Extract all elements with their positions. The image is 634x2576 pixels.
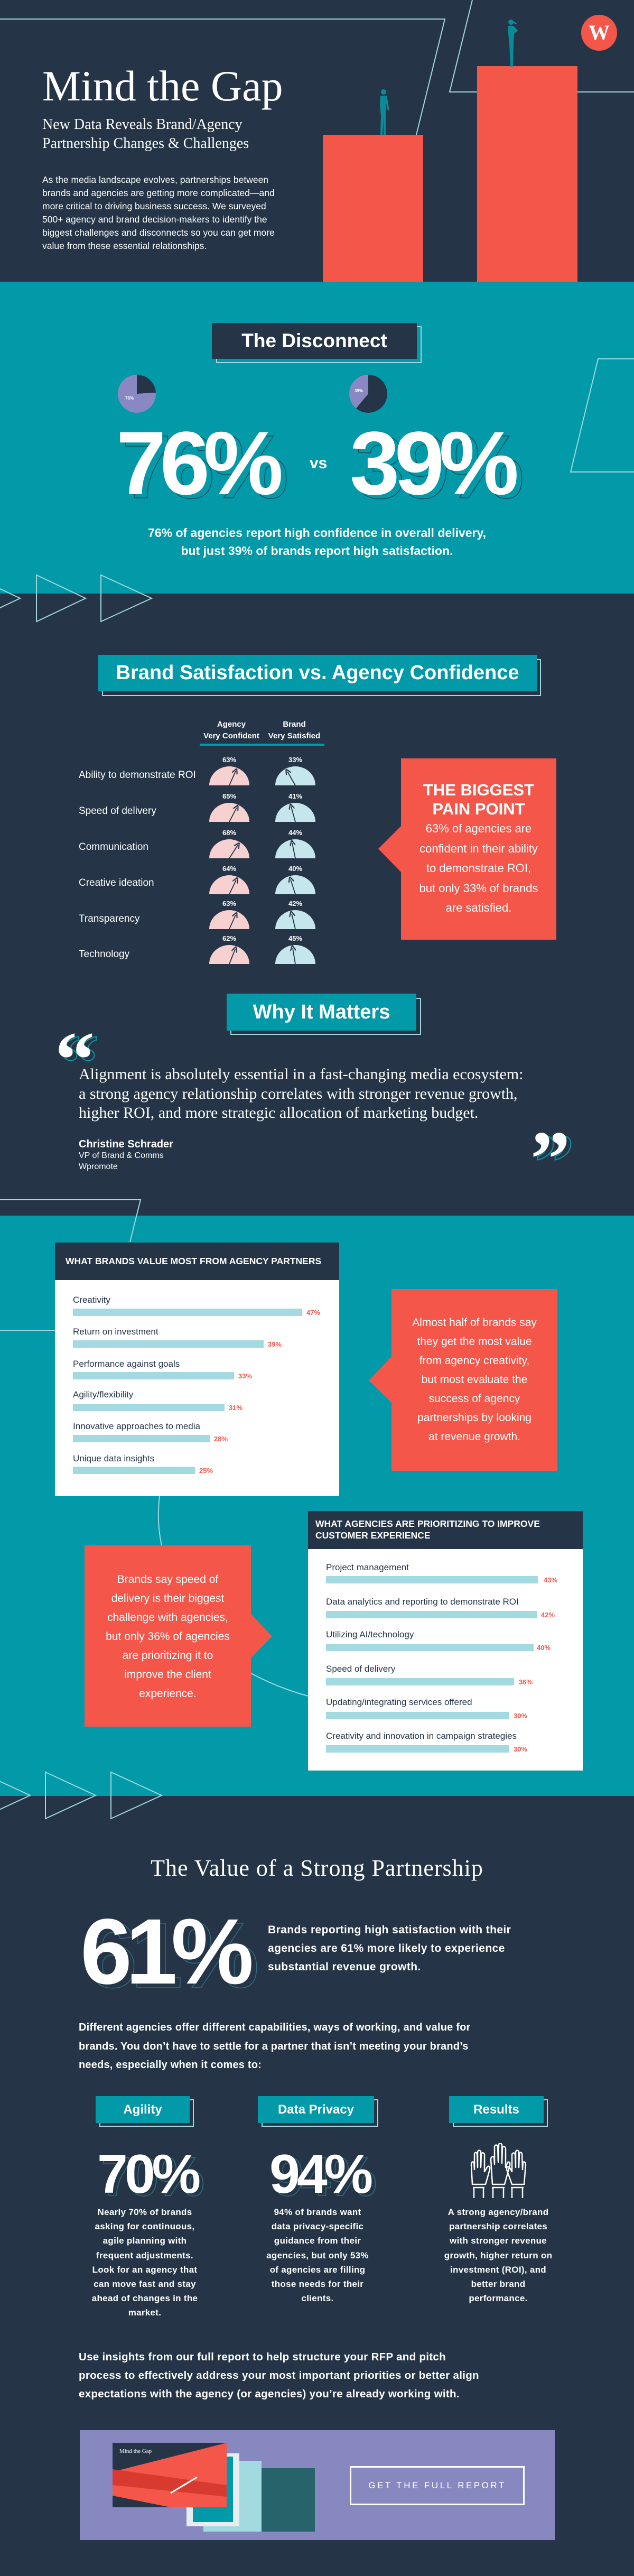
panel header: CUSTOMER EXPERIENCE [315, 1530, 430, 1541]
gauge chart: 62% [222, 934, 236, 942]
text: results [444, 2207, 552, 2303]
callout: biggest pain point [378, 758, 556, 940]
intro paragraph: needs, especially when it comes to: [79, 2059, 262, 2071]
panel header: WHAT AGENCIES ARE PRIORITIZING TO IMPROVE [315, 1518, 540, 1529]
gauge chart: 63% [222, 756, 236, 764]
row labels [79, 770, 196, 960]
quote text: higher ROI, and more strategic allocation of marketing budget. [79, 1104, 478, 1122]
tag: Results [449, 2096, 548, 2127]
callout: biggest pain point: are satisfied. [446, 901, 511, 914]
attribution: Wpromote [79, 1162, 118, 1171]
panel: what brands value: 28% [214, 1435, 228, 1443]
callout: speed of delivery: experience. [139, 1688, 197, 1700]
61% description: substantial revenue growth. [268, 1961, 421, 1973]
column headers: Very Satisfied [268, 731, 320, 740]
disconnect caption: 76% of agencies report high confidence in overall delivery, [148, 526, 486, 540]
text: results: growth, higher return on [444, 2250, 552, 2260]
disconnect caption [148, 526, 486, 558]
intro text: brands and agencies are getting more complicated—and [42, 188, 275, 198]
pie: 76% [118, 375, 156, 413]
text: Technology [79, 949, 129, 960]
intro text: value from these essential relationships. [42, 240, 207, 251]
disconnect caption: but just 39% of brands report high satisfaction. [181, 544, 453, 558]
gauge chart: 40% [288, 865, 302, 873]
intro paragraph: brands. You don’t have to settle for a partner that isn’t meeting your brand’s [79, 2040, 469, 2052]
gauge chart: 65% [222, 792, 236, 800]
pie: 39% [349, 375, 387, 413]
heading: The Disconnect [212, 323, 422, 363]
panel: agencies prioritizing: 40% [537, 1644, 551, 1652]
callout: creativity [369, 1289, 557, 1471]
attribution: Christine Schrader [79, 1138, 173, 1150]
closing paragraph: expectations with the agency (or agencies) you’re already working with. [79, 2388, 460, 2400]
callout: creativity: partnerships by looking [417, 1412, 532, 1424]
column headers: Brand [283, 720, 306, 729]
text: data privacy: 94% of brands want [274, 2207, 361, 2217]
heading: Brand Satisfaction vs. Agency Confidence [98, 655, 541, 696]
column headers: Agency [217, 720, 246, 729]
column headers: Very Confident [203, 731, 259, 740]
heading: The Disconnect: The Disconnect [241, 330, 387, 351]
callout: creativity: from agency creativity, [419, 1355, 529, 1367]
text: Communication [79, 841, 148, 853]
intro text: As the media landscape evolves, partnerships between [42, 174, 268, 185]
panel: what brands value: 25% [199, 1467, 213, 1475]
panel: what brands value: Unique data insights [73, 1453, 154, 1463]
pie: 76%: 76% [125, 396, 134, 401]
callout: biggest pain point: confident in their ability [419, 841, 538, 855]
panel: agencies prioritizing: 42% [541, 1611, 555, 1619]
text: agility: agile planning with [103, 2236, 187, 2246]
report mockup [113, 2443, 315, 2532]
callout: creativity: success of agency [429, 1393, 520, 1405]
text: Speed of delivery [79, 805, 156, 817]
callout: speed of delivery [85, 1545, 272, 1727]
text: Ability to demonstrate ROI [79, 770, 196, 781]
attribution [79, 1138, 173, 1171]
stat: 76%: 76% [116, 413, 277, 514]
panel: what brands value: Creativity [73, 1295, 110, 1305]
panel header [55, 1243, 339, 1280]
heading: Brand Satisfaction vs. Agency Confidence: Brand Satisfaction vs. Agency Confidence [116, 662, 519, 684]
text: data privacy: guidance from their [274, 2236, 361, 2246]
gauge chart [209, 756, 315, 964]
61% description: Brands reporting high satisfaction with their [268, 1924, 511, 1936]
stat: 61%: 61% [80, 1900, 247, 2004]
column headers [200, 719, 324, 746]
attribution: VP of Brand & Comms [79, 1151, 164, 1160]
tag: Data Privacy: Data Privacy [278, 2102, 354, 2117]
gauge chart: 68% [222, 829, 236, 837]
heading: Why It Matters [227, 994, 421, 1035]
callout: creativity: but most evaluate the [422, 1374, 527, 1386]
stat: 94%: 94% [269, 2144, 370, 2205]
tag: Agility [96, 2096, 194, 2127]
callout: creativity: Almost half of brands say [412, 1317, 537, 1329]
closing paragraph [79, 2351, 479, 2400]
text: results: A strong agency/brand [448, 2207, 548, 2217]
logo [581, 15, 617, 51]
stat: 39%: 39% [350, 413, 514, 514]
panel: agencies prioritizing: 36% [519, 1678, 533, 1686]
callout: creativity: they get the most value [417, 1336, 532, 1348]
intro paragraph: Different agencies offer different capabilities, ways of working, and value for [79, 2022, 471, 2033]
text: agility [92, 2207, 198, 2318]
panel: agencies prioritizing: 43% [544, 1576, 557, 1584]
callout: speed of delivery: improve the client [124, 1669, 211, 1681]
panel header: WHAT BRANDS VALUE MOST FROM AGENCY PARTNERS [66, 1256, 321, 1266]
text: Creative ideation [79, 877, 154, 888]
text: results: partnership correlates [449, 2221, 547, 2231]
callout: creativity: at revenue growth. [428, 1431, 520, 1443]
text: “ [55, 1016, 95, 1104]
gauge chart: 33% [288, 756, 302, 764]
panel: what brands value: Innovative approaches to media [73, 1421, 200, 1431]
quote text [79, 1065, 523, 1122]
panel: what brands value: Performance against goals [73, 1359, 180, 1369]
text: results: investment (ROI), and [450, 2265, 546, 2275]
intro text [42, 174, 275, 251]
panel: agencies prioritizing: 30% [514, 1712, 527, 1720]
panel: what brands value: 31% [229, 1404, 243, 1412]
stat: 70%: 70% [97, 2144, 198, 2205]
panel: what brands value: Agility/flexibility [73, 1389, 133, 1400]
panel header [308, 1511, 583, 1549]
text: ” [530, 1115, 570, 1203]
heading: Why It Matters: Why It Matters [253, 1001, 390, 1023]
panel: agencies prioritizing: Creativity and innovation in campaign strategies [326, 1731, 517, 1741]
subtitle [42, 116, 249, 152]
panel: agencies prioritizing: Utilizing AI/technology [326, 1629, 414, 1639]
text: results: better brand [471, 2279, 525, 2289]
button: GET THE FULL REPORT [368, 2480, 506, 2490]
panel: agencies prioritizing [308, 1511, 583, 1771]
callout: biggest pain point: but only 33% of brands [419, 882, 538, 894]
intro paragraph [79, 2022, 471, 2071]
closing paragraph: Use insights from our full report to help structure your RFP and pitch [79, 2351, 446, 2363]
subtitle: New Data Reveals Brand/Agency [42, 116, 243, 133]
panel: agencies prioritizing: Project management [326, 1562, 409, 1572]
icon: figure small [380, 89, 389, 135]
subtitle: Partnership Changes & Challenges [42, 135, 249, 152]
callout: speed of delivery: Brands say speed of [117, 1573, 218, 1586]
text: agility: Look for an agency that [92, 2265, 197, 2275]
title: Mind the Gap [42, 62, 283, 110]
heading: value of a strong partnership: The Value of a Strong Partnership [151, 1855, 483, 1881]
intro text: 500+ agency and brand decision-makers to identify the [42, 214, 267, 225]
text: Transparency [79, 913, 139, 924]
teal band: disconnect [0, 282, 634, 594]
icon: open quote [55, 1016, 97, 1104]
callout: biggest pain point: 63% of agencies are [426, 822, 532, 835]
gauge chart: 64% [222, 865, 236, 873]
text: results: performance. [469, 2293, 528, 2303]
quote text: a strong agency relationship correlates with stronger revenue growth, [79, 1085, 518, 1102]
callout: speed of delivery: challenge with agencies, [107, 1611, 228, 1624]
report mockup: Mind the Gap [119, 2448, 152, 2454]
panel: what brands value: 33% [238, 1372, 252, 1380]
gauge chart: 45% [288, 934, 302, 942]
callout: biggest pain point: PAIN POINT [432, 800, 525, 818]
callout: speed of delivery: but only 36% of agencies [106, 1630, 230, 1643]
text: agility: can move fast and stay [94, 2279, 196, 2289]
text: results: with stronger revenue [450, 2236, 547, 2246]
gauge chart: 42% [288, 900, 302, 907]
text: data privacy: data privacy-specific [272, 2221, 363, 2231]
panel: what brands value: Return on investment [73, 1327, 158, 1337]
text: agility: frequent adjustments. [96, 2250, 193, 2260]
panel: agencies prioritizing: Data analytics and reporting to demonstrate ROI [326, 1597, 519, 1607]
text: data privacy: clients. [301, 2293, 333, 2303]
text: data privacy: those needs for their [272, 2279, 363, 2289]
tag: Data Privacy [258, 2096, 378, 2127]
tag: Agility: Agility [123, 2102, 162, 2117]
text: data privacy [266, 2207, 369, 2303]
callout: speed of delivery: are prioritizing it to [123, 1650, 213, 1662]
text: agility: market. [128, 2308, 161, 2318]
tag: Results: Results [473, 2102, 519, 2117]
panel: what brands value: 39% [268, 1340, 282, 1348]
icon: figure tall [508, 20, 518, 67]
hero: red bars [323, 135, 423, 282]
intro text: more critical to driving business success. We surveyed [42, 201, 266, 211]
gauge chart: 63% [222, 900, 236, 907]
panel: what brands value: 47% [306, 1309, 320, 1317]
gauge chart: 41% [288, 792, 302, 800]
panel: agencies prioritizing: Updating/integrating services offered [326, 1697, 472, 1707]
callout: speed of delivery: delivery is their biggest [111, 1592, 224, 1605]
callout: biggest pain point: THE BIGGEST [423, 781, 534, 799]
text: data privacy: of agencies are filling [270, 2265, 365, 2275]
panel: agencies prioritizing: 30% [514, 1745, 527, 1753]
callout: biggest pain point: to demonstrate ROI, [426, 861, 531, 875]
panel: what brands value [55, 1243, 339, 1496]
61% description: agencies are 61% more likely to experience [268, 1942, 505, 1954]
quote text: Alignment is absolutely essential in a fast-changing media ecosystem: [79, 1065, 523, 1083]
text: agility: ahead of changes in the [92, 2293, 198, 2303]
vs: vs [310, 455, 327, 472]
panel: agencies prioritizing: Speed of delivery [326, 1664, 395, 1674]
text: data privacy: agencies, but only 53% [266, 2250, 369, 2260]
CTA banner [80, 2430, 555, 2540]
61% description [268, 1924, 511, 1973]
text: agility: asking for continuous, [95, 2221, 194, 2231]
logo: W [589, 21, 610, 44]
text: agility: Nearly 70% of brands [98, 2207, 192, 2217]
icon: close quote [530, 1115, 572, 1203]
gauge chart: 44% [288, 829, 302, 837]
teal band: charts [0, 1216, 634, 1796]
button [350, 2466, 525, 2505]
pie: 39%: 39% [355, 388, 363, 393]
icon: raised hands [470, 2143, 526, 2198]
closing paragraph: process to effectively address your most important priorities or better align [79, 2369, 479, 2382]
intro text: biggest challenges and disconnects so you can get more [42, 227, 275, 238]
